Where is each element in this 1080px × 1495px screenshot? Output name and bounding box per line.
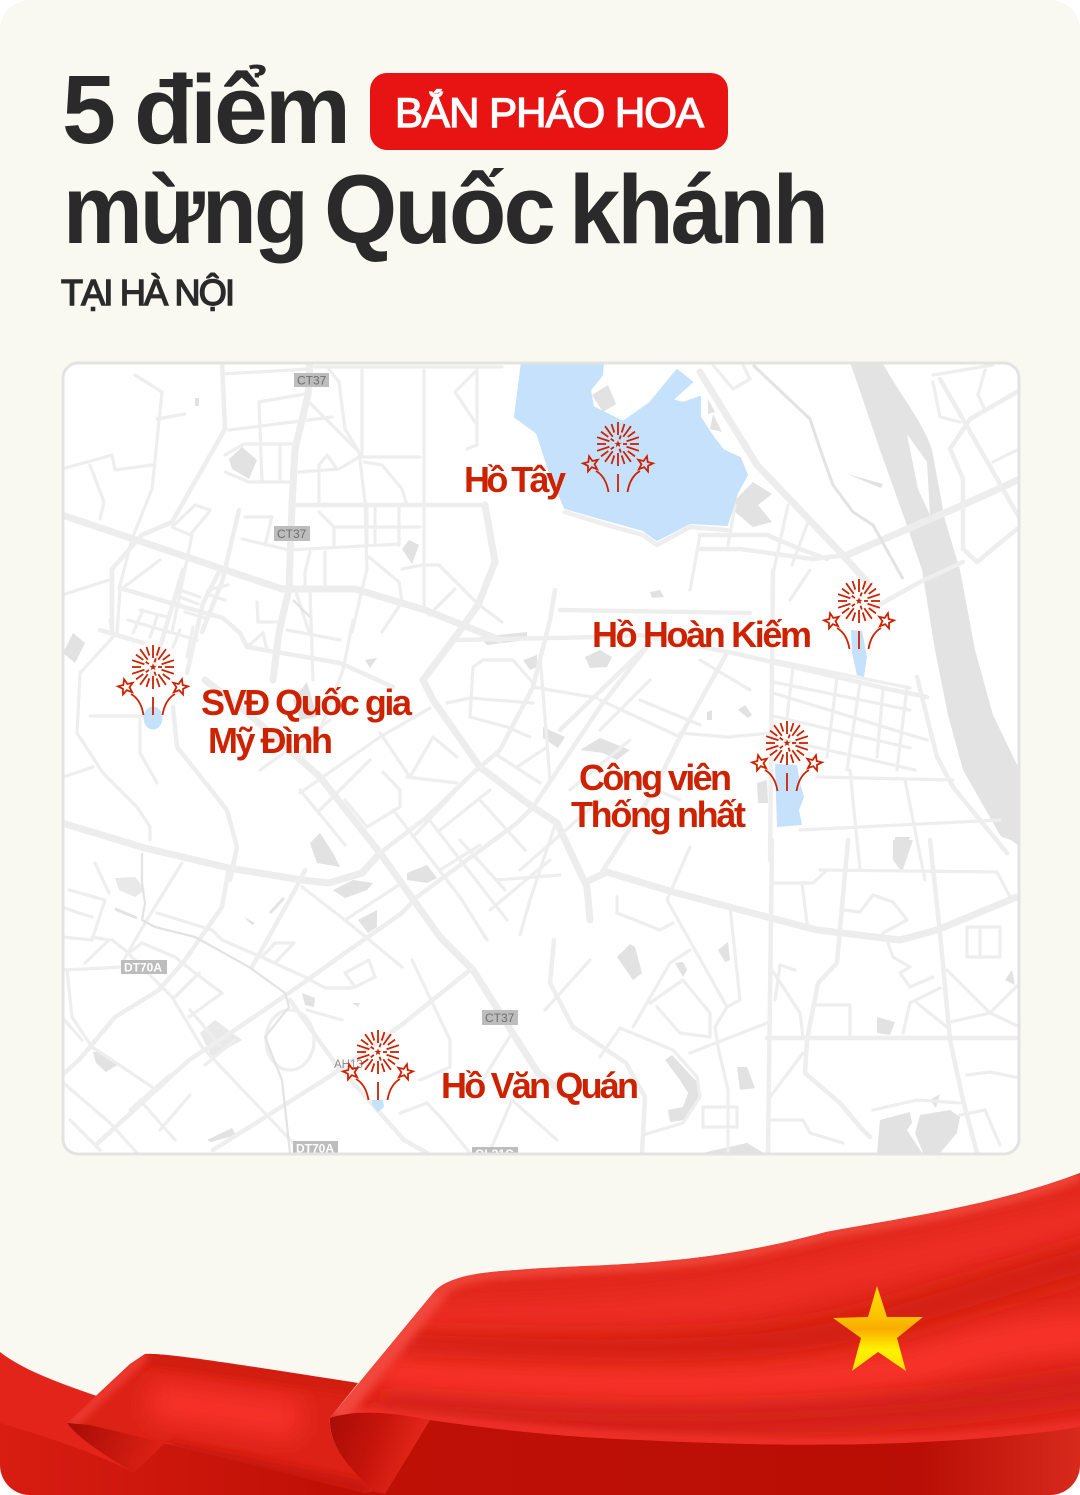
label: Hồ Tây: Hồ Tây [464,459,566,500]
ribbon: inner fold main [330,1412,430,1494]
badge: bắn pháo hoa: BẮN PHÁO HOA [395,88,704,136]
title line 2: khánh [569,155,826,264]
road label QL21C: QL21C [475,1147,514,1161]
road label DT70A left: DT70A [124,960,162,974]
flag star [833,1286,923,1371]
panel: map of Hanoi [60,362,1022,1161]
icon: firework Hồ Tây [582,422,654,492]
label: Công viên Thống nhất: Công viên [579,757,732,798]
road label CT37 middle: CT37 [277,527,307,541]
title line 2: mừng [63,155,306,264]
label: SVĐ Quốc gia Mỹ Đình: Mỹ Đình [208,720,333,761]
ribbon: inner fold left [67,1423,165,1473]
road label AH13: AH13 [334,1059,363,1071]
flag ribbon [0,1170,1080,1495]
roads: major [62,362,1020,1100]
map border [63,363,1019,1154]
label: Công viên Thống nhất [571,757,746,835]
lake: Hoàn Kiếm [851,630,867,677]
icon: firework Hoàn Kiếm [823,579,895,649]
ribbon: main flag band [320,1170,1080,1460]
ribbon: dark back band [0,1415,1080,1495]
river [850,362,1022,850]
label: Hồ Văn Quán: Hồ Văn Quán [441,1065,639,1106]
icon: firework Mỹ Đình [117,645,189,715]
title line 1: điểm [134,55,348,164]
lake: Hồ Tây [515,362,747,540]
label: Hồ Hoàn Kiếm: Hồ Hoàn Kiếm [592,614,812,655]
lake: Thống Nhất [775,764,804,827]
gray patches [63,385,1015,1155]
map base layers [60,362,1022,1161]
label: Công viên Thống nhất: Thống nhất [571,794,746,835]
title line 2 [63,155,826,264]
lake: Mỹ Đình [144,706,162,730]
lake: Văn Quán [372,1100,384,1112]
icon: firework Văn Quán [342,1030,414,1100]
subtitle: TẠI HÀ NỘI [61,272,235,313]
title line 2: Quốc [324,155,554,264]
road label DT70A bottom [293,1141,338,1152]
darker thin roads [115,365,903,1153]
road label DT70A bottom: DT70A [296,1142,334,1156]
badge: bắn pháo hoa [370,73,728,150]
label: SVĐ Quốc gia Mỹ Đình [201,682,413,761]
ribbon: left band [0,1352,134,1473]
label: SVĐ Quốc gia Mỹ Đình: SVĐ Quốc gia [201,682,413,723]
ribbon: middle band [68,1354,374,1493]
icon: firework Thống Nhất [751,721,823,791]
road label CT37 top: CT37 [297,374,327,388]
road label CT37 bottom: CT37 [485,1011,515,1025]
title line 1: 5 [62,55,114,164]
road label QL21C [472,1147,518,1152]
